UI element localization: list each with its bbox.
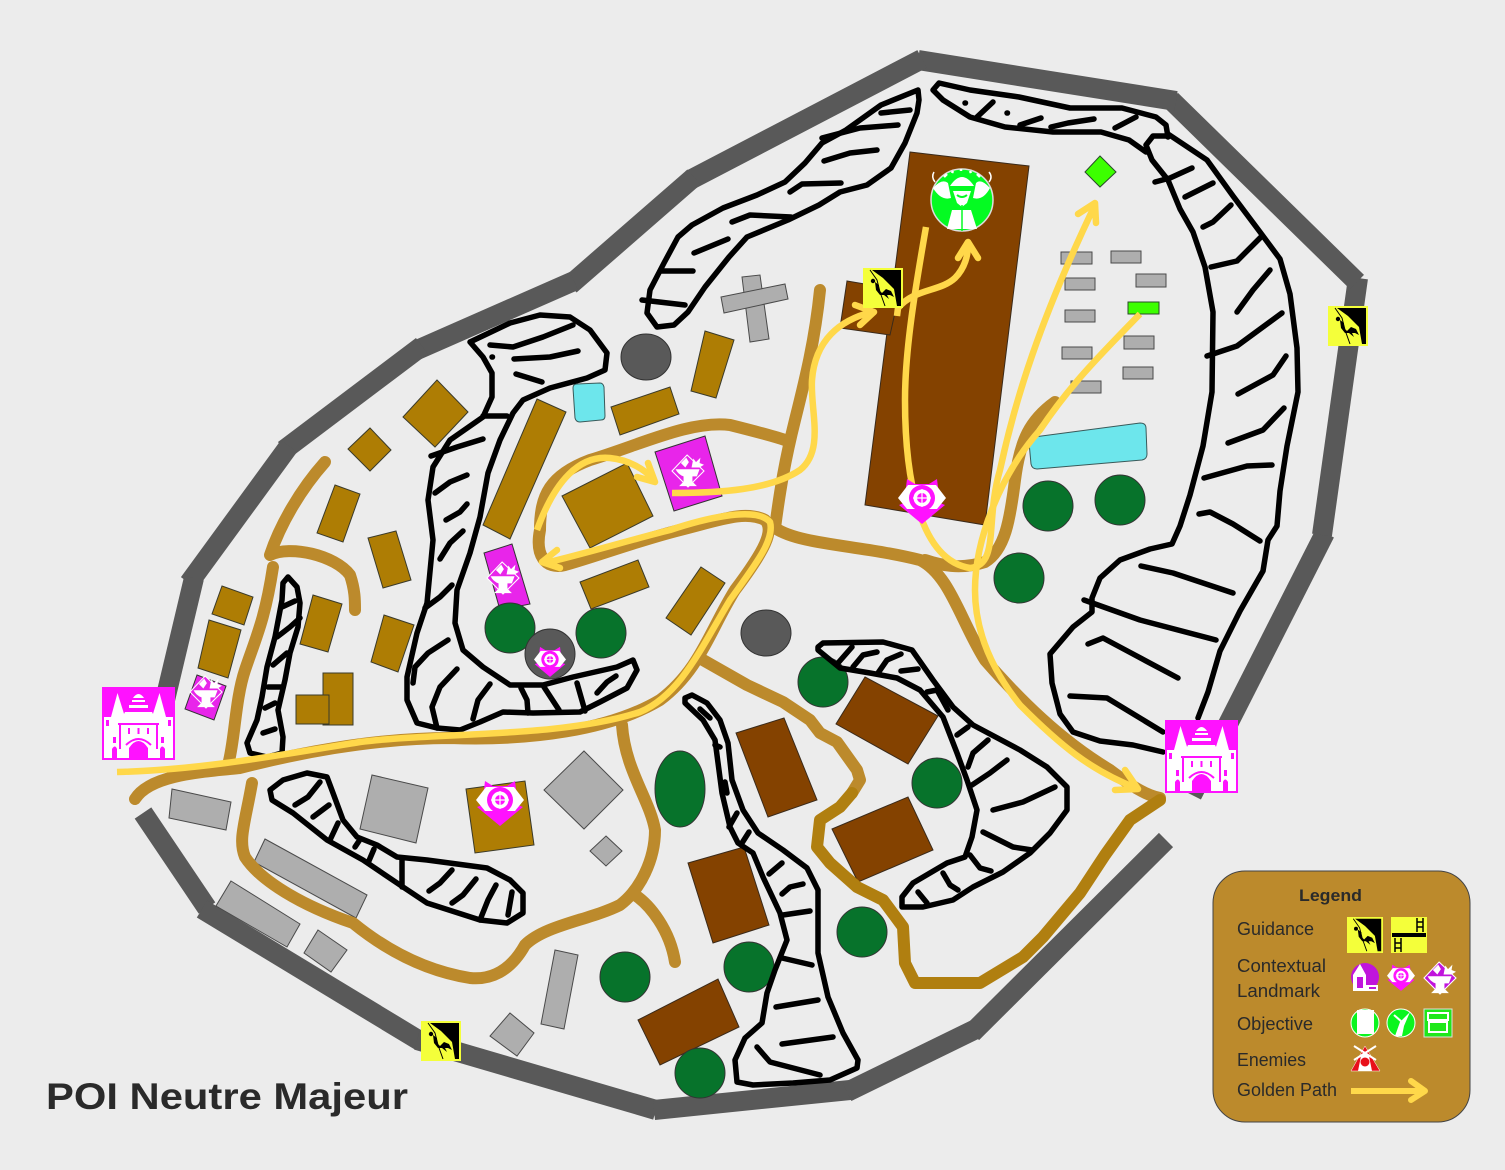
cliffs xyxy=(247,83,1298,1085)
legend: climb icon xyxy=(1347,917,1383,953)
icon: west castle entrance xyxy=(102,687,175,760)
icon: target landmark rock xyxy=(534,647,566,677)
cyan water pools xyxy=(573,383,1147,469)
icon: anvil landmark north xyxy=(672,455,704,487)
legend: church icon xyxy=(1351,963,1379,991)
legend: chest objective icon xyxy=(1424,1009,1452,1037)
icon: target landmark gold hall xyxy=(476,781,524,826)
legend: guidance label: Guidance xyxy=(1237,919,1314,939)
legend: runner objective icon xyxy=(1387,1009,1415,1037)
golden path: main west approach xyxy=(117,514,771,772)
cliff: lower centre xyxy=(685,695,858,1085)
golden path: to boss xyxy=(897,242,978,316)
cliff: top ridge xyxy=(933,83,1168,152)
magenta landmark buildings xyxy=(185,436,722,720)
icon: east castle entrance xyxy=(1165,720,1238,793)
legend: objective label: Objective xyxy=(1237,1014,1313,1034)
golden path arrows xyxy=(117,203,1140,790)
dark dirt road xyxy=(817,793,1160,983)
outer walls xyxy=(143,59,1358,1110)
golden path: to climb xyxy=(672,305,874,493)
legend: golden path arrow xyxy=(1351,1081,1425,1100)
icon: climb guidance central xyxy=(863,268,903,308)
cliff: lower right xyxy=(818,642,1067,907)
legend: door objective icon xyxy=(1351,1009,1379,1037)
cliff: left centre xyxy=(407,315,637,730)
legend: contextual landmark label: Landmark xyxy=(1237,981,1321,1001)
cliff: right range xyxy=(1050,134,1298,752)
icon: climb guidance south xyxy=(421,1021,461,1061)
golden path: boss room to diamond xyxy=(905,203,1096,568)
icon: climb guidance east xyxy=(1328,306,1368,346)
golden path: exit east xyxy=(975,314,1140,790)
title: POI Neutre Majeur xyxy=(46,1076,408,1117)
icon: boss objective xyxy=(931,169,993,231)
legend: golden path label: Golden Path xyxy=(1237,1080,1337,1100)
legend heading: Legend xyxy=(1299,886,1362,905)
legend panel xyxy=(1213,871,1470,1122)
cliff: small left xyxy=(247,577,300,757)
objective buildings xyxy=(1085,156,1159,314)
gray buildings xyxy=(169,251,1166,1056)
gold buildings xyxy=(198,331,734,853)
tree circles and rocks xyxy=(485,334,1145,1098)
legend: ladder icon xyxy=(1391,917,1427,953)
icon: anvil landmark centre xyxy=(487,562,519,594)
icon: target landmark boss hall xyxy=(898,479,946,524)
golden path: to landmark xyxy=(537,458,655,530)
legend: enemies icon xyxy=(1351,1046,1380,1071)
light dirt roads xyxy=(135,290,1160,978)
legend: anvil icon xyxy=(1424,962,1456,994)
cliff: top middle xyxy=(642,90,919,327)
legend: contextual landmark label: Contextual xyxy=(1237,956,1326,976)
legend: enemies label: Enemies xyxy=(1237,1050,1306,1070)
brown buildings xyxy=(638,152,1029,1065)
icon: anvil landmark west xyxy=(190,676,222,708)
legend: target icon xyxy=(1387,965,1415,991)
cliff: lower left xyxy=(270,773,523,923)
